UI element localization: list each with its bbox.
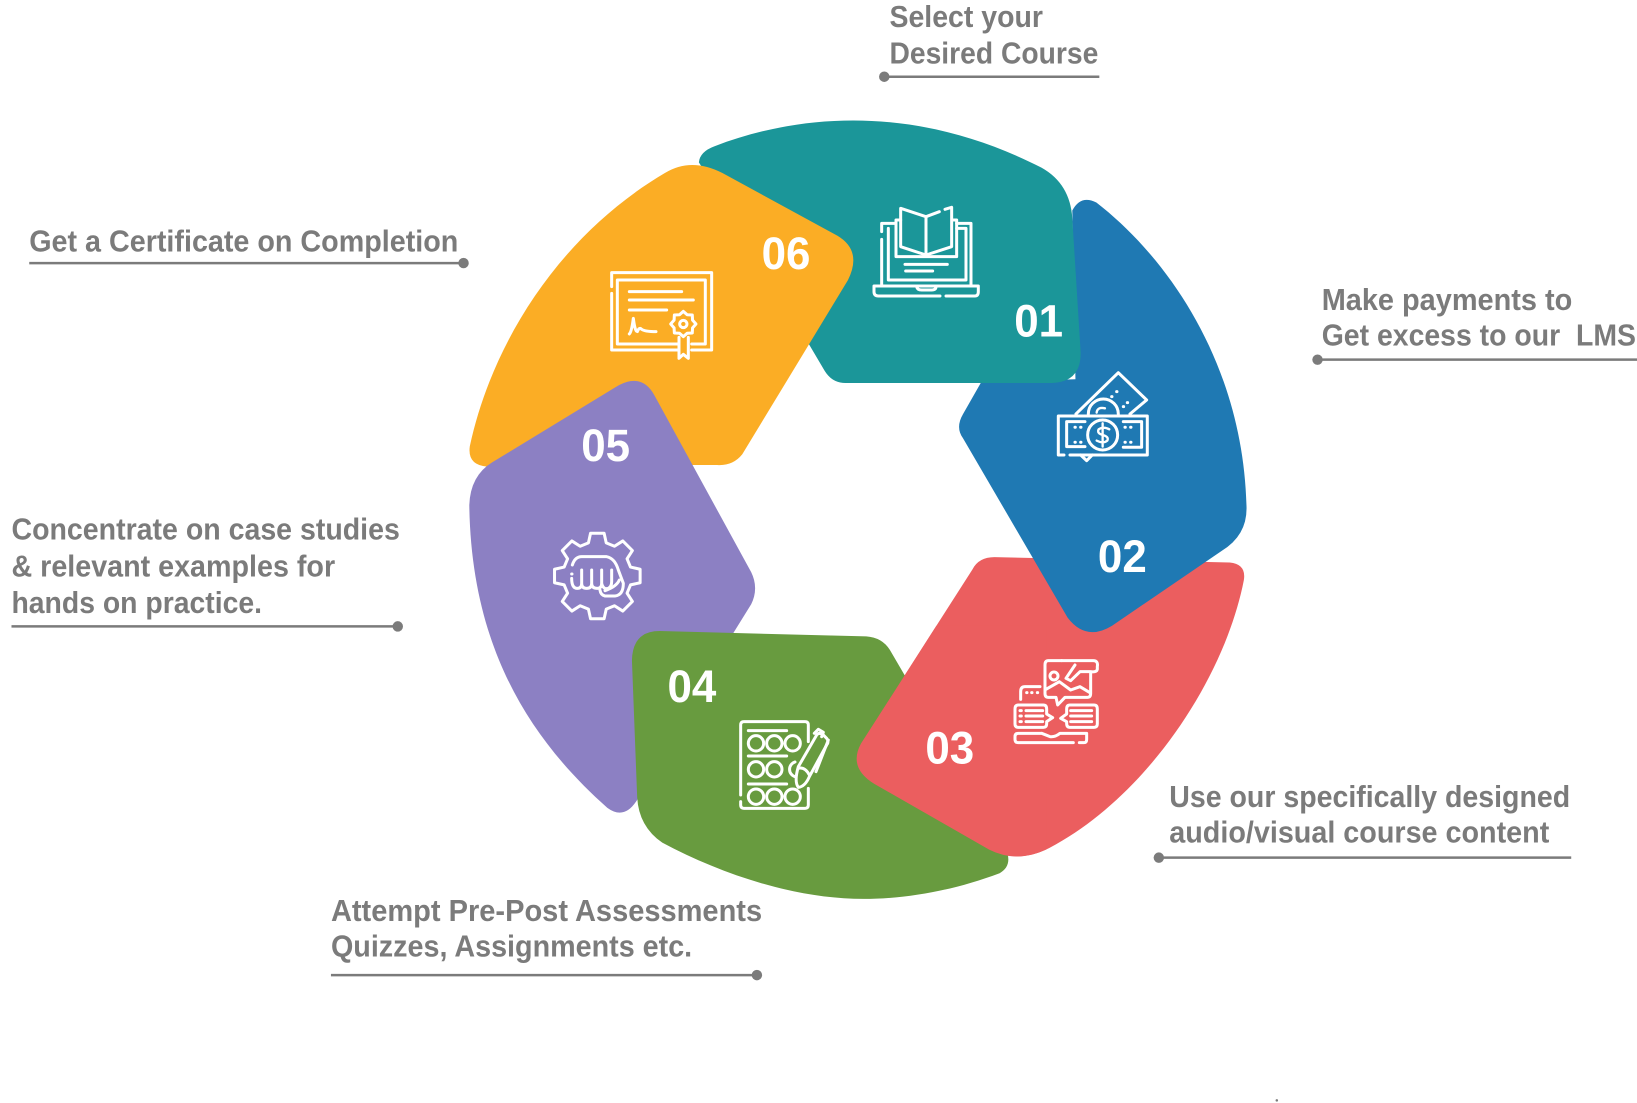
segment 01 teal [699, 121, 1081, 383]
label: step 1 select course: Select your [889, 1, 1043, 34]
label: step 6 certificate: Get a Certificate on Completion [29, 226, 458, 259]
icon: fist in gear [555, 533, 640, 619]
number 03: 03 [925, 724, 974, 773]
segment 05 purple [469, 381, 755, 813]
label: step 4 assessments: Attempt Pre-Post Assessments [331, 895, 762, 928]
icon: money [1058, 373, 1147, 461]
label: step 4 assessments [331, 895, 762, 980]
label: step 5 case studies: & relevant examples for [11, 550, 335, 583]
label: step 3 course content: Use our specifically designed [1169, 781, 1570, 814]
label: step 5 case studies: hands on practice. [11, 587, 262, 620]
cycle wheel [469, 121, 1247, 899]
label: step 3 course content: audio/visual course content [1169, 817, 1549, 850]
label: step 3 course content [1154, 781, 1571, 863]
icon: media chat [1015, 661, 1097, 743]
segment 03 red [857, 557, 1244, 856]
number 04: 04 [668, 662, 717, 712]
number 05: 05 [581, 422, 630, 471]
number 01: 01 [1014, 297, 1063, 347]
label: step 2 payments: Make payments to [1322, 284, 1572, 317]
label: step 2 payments [1312, 284, 1637, 365]
label: step 5 case studies [11, 514, 403, 632]
label: step 1 select course: Desired Course [889, 38, 1098, 71]
label: step 5 case studies: Concentrate on case studies [11, 514, 400, 547]
number 06: 06 [762, 229, 811, 279]
label: step 1 select course [879, 1, 1099, 82]
icon: certificate [612, 273, 712, 358]
icon: quiz sheet with pen [741, 722, 828, 808]
segment 06 yellow [470, 165, 853, 467]
number 02: 02 [1098, 533, 1147, 582]
segment 03 red overlap on green [856, 626, 1047, 856]
label: step 4 assessments: Quizzes, Assignments etc. [331, 930, 692, 963]
icon: laptop with book [874, 207, 978, 296]
segment 02 blue [959, 200, 1247, 632]
segment 04 green [632, 631, 1008, 899]
